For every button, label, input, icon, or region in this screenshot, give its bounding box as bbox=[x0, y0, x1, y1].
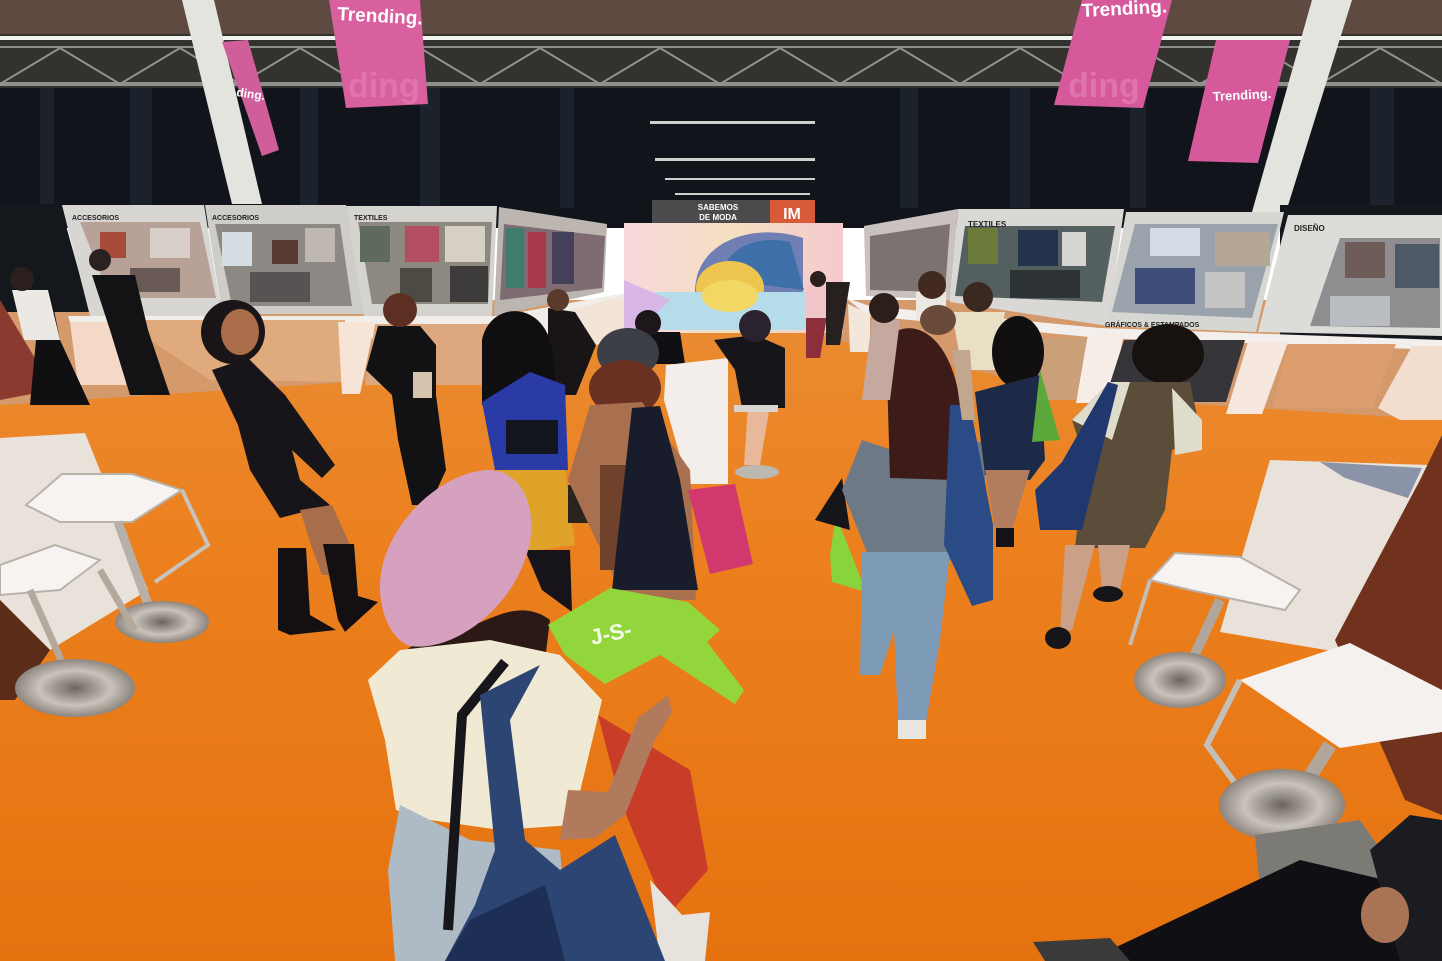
centre LED screen bbox=[624, 200, 843, 333]
left red display corner bbox=[0, 300, 42, 400]
centre LED screen: DE MODA bbox=[699, 213, 737, 222]
curtain centre lights bbox=[650, 121, 815, 195]
panel collage tiles, left bbox=[100, 226, 574, 302]
woman blue top and yellow skirt bbox=[482, 311, 592, 612]
curtain folds bbox=[40, 88, 1394, 208]
right bar stools bbox=[1130, 553, 1442, 841]
foreground woman with beret and green bag: J-S- bbox=[588, 617, 634, 650]
red shopping bag bbox=[598, 715, 708, 915]
green tote bbox=[548, 588, 744, 704]
cream shirt bbox=[368, 640, 602, 830]
denim tote strap and bag bbox=[445, 665, 665, 961]
right display panels bbox=[864, 209, 1442, 336]
right display panels: TEXTILES bbox=[968, 220, 1007, 229]
seated person bottom right bbox=[1033, 815, 1442, 961]
hanging pink banners bbox=[222, 0, 1290, 163]
white sneaker bbox=[650, 880, 710, 961]
magazines on right plinth bbox=[1320, 462, 1422, 498]
background people, centre bbox=[547, 271, 850, 395]
centre LED screen: SABEMOS bbox=[698, 203, 739, 212]
right display panels: DISEÑO bbox=[1294, 224, 1325, 233]
left display panels: ACCESORIOS bbox=[72, 215, 119, 222]
woman with cap and pink bag bbox=[568, 328, 753, 600]
right dark red wall bbox=[1335, 435, 1442, 815]
orange floor bbox=[0, 332, 1442, 961]
white support columns bbox=[182, 0, 1352, 212]
left display panels: TEXTILES bbox=[354, 215, 388, 222]
ceiling bbox=[0, 0, 1442, 90]
woman black outfit looking back bbox=[201, 300, 378, 635]
woman denim jacket walking away bbox=[815, 328, 993, 739]
arm bbox=[560, 695, 672, 840]
hanging pink banners: Trending. bbox=[337, 4, 423, 29]
woman black jumpsuit bbox=[366, 293, 446, 505]
glass band behind tables bbox=[0, 300, 1442, 425]
foreground woman with beret and green bag bbox=[368, 470, 744, 961]
left white plinth bbox=[0, 433, 148, 650]
right display tables bbox=[846, 298, 1442, 420]
beret bbox=[380, 470, 531, 647]
right display panels: GRÁFICOS & ESTAMPADOS bbox=[1105, 320, 1200, 329]
background group, right bbox=[862, 271, 1005, 420]
background people, left bbox=[10, 249, 170, 405]
hair bbox=[400, 610, 550, 665]
hanging pink banners: ding bbox=[348, 67, 420, 105]
hanging pink banners: ding. bbox=[236, 85, 266, 103]
woman brown dress walking away bbox=[1035, 324, 1204, 649]
black curtain back wall bbox=[0, 88, 1442, 228]
woman blue dress with green bag bbox=[975, 316, 1060, 547]
jeans bbox=[388, 805, 570, 961]
left display panels bbox=[62, 205, 607, 316]
white plinth with seated woman bbox=[664, 310, 785, 484]
centre LED screen: IM bbox=[783, 206, 801, 223]
hanging pink banners: Trending. bbox=[1212, 86, 1272, 104]
thin black strap bbox=[448, 662, 505, 930]
panel collage tiles, right bbox=[968, 228, 1439, 326]
right back wall strip bbox=[1280, 205, 1442, 340]
left bar stools bbox=[0, 474, 209, 717]
left display tables bbox=[68, 292, 630, 394]
right white plinth bbox=[1220, 460, 1430, 660]
left back wall bbox=[0, 204, 90, 312]
left display panels: ACCESORIOS bbox=[212, 215, 259, 222]
hanging pink banners: ding bbox=[1068, 67, 1140, 105]
